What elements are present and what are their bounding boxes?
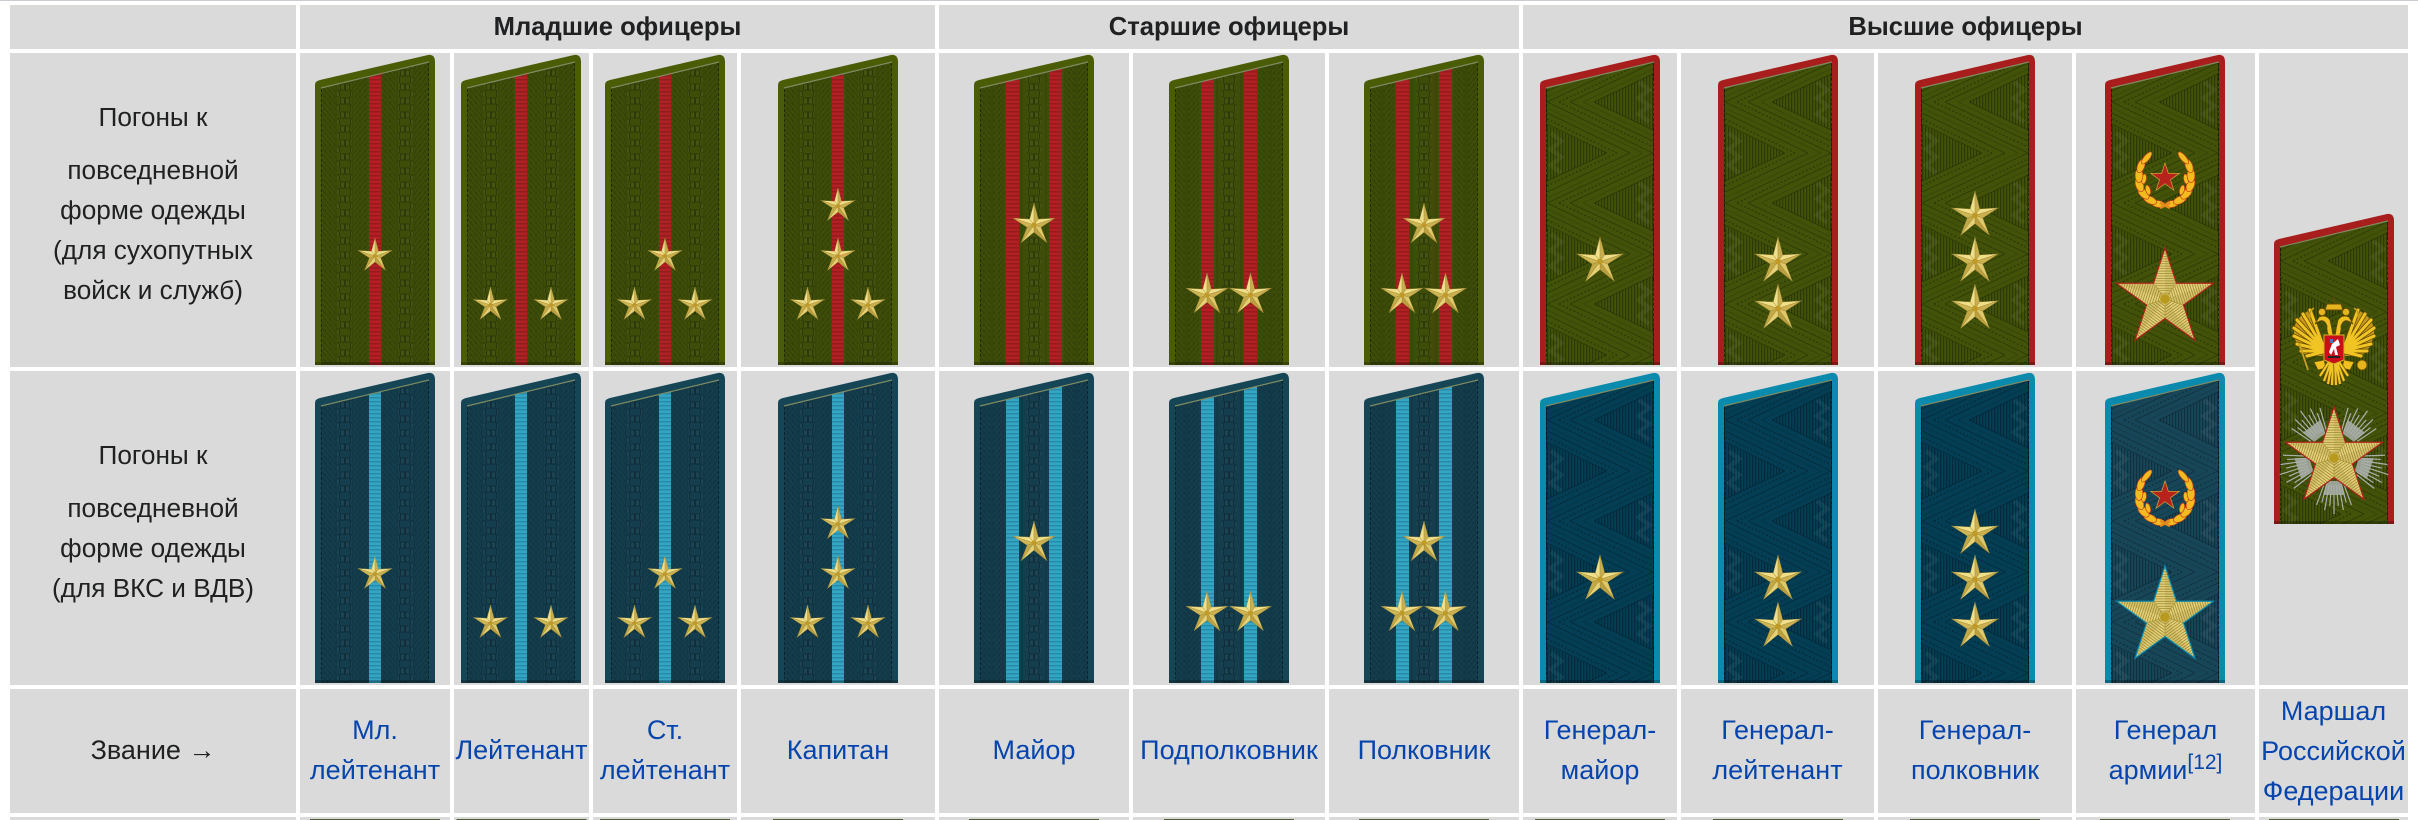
shoulder board: major general, aerospace bbox=[1540, 373, 1660, 683]
shoulder board: colonel, aerospace bbox=[1364, 373, 1484, 683]
row label: aerospace and airborne shoulder boards: форме одежды bbox=[60, 533, 246, 563]
shoulder board: senior lieutenant, aerospace bbox=[605, 373, 725, 683]
rank name: junior lieutenant: лейтенант bbox=[310, 755, 440, 785]
row label: aerospace and airborne shoulder boards: повседневной bbox=[67, 493, 239, 523]
rank name: senior lieutenant: лейтенант bbox=[600, 755, 730, 785]
shoulder board: colonel general, aerospace bbox=[1915, 373, 2035, 683]
shoulder board: major general, ground bbox=[1540, 55, 1660, 365]
row label: rank: Звание → bbox=[91, 735, 215, 765]
shoulder board: major, ground bbox=[974, 55, 1094, 365]
shoulder board: army general, ground bbox=[2105, 55, 2225, 365]
row label: ground forces shoulder boards: войск и служб) bbox=[63, 275, 243, 305]
shoulder board: colonel general, ground bbox=[1915, 55, 2035, 365]
shoulder board: lieutenant general, aerospace bbox=[1718, 373, 1838, 683]
shoulder board: junior lieutenant, ground bbox=[315, 55, 435, 365]
shoulder board: marshal of the Russian Federation bbox=[2274, 214, 2394, 524]
bottom row image edges bbox=[310, 819, 2399, 820]
rank name: marshal of the Russian Federation: Маршал bbox=[2281, 696, 2386, 726]
shoulder board: lieutenant, ground bbox=[461, 55, 581, 365]
icon: silver star rays bbox=[2274, 401, 2394, 514]
rank name: major general: Генерал- bbox=[1544, 715, 1656, 745]
rank name: senior lieutenant bbox=[600, 715, 730, 785]
rank name: junior lieutenant bbox=[310, 715, 440, 785]
rank name: colonel general: полковник bbox=[1911, 755, 2039, 785]
shoulder board: lieutenant colonel, aerospace bbox=[1169, 373, 1289, 683]
shoulder board: colonel, ground bbox=[1364, 55, 1484, 365]
icon: double-headed eagle bbox=[2294, 297, 2374, 385]
shoulder board: lieutenant colonel, ground bbox=[1169, 55, 1289, 365]
shoulder board: captain, ground bbox=[778, 55, 898, 365]
icon: marshal star bbox=[2283, 409, 2385, 506]
shoulder board: army general, aerospace bbox=[2105, 373, 2225, 683]
row label: ground forces shoulder boards bbox=[53, 102, 253, 305]
row label: aerospace and airborne shoulder boards bbox=[52, 440, 254, 603]
row label: ground forces shoulder boards: повседневной bbox=[67, 155, 239, 185]
rank name: colonel general bbox=[1911, 715, 2040, 785]
rank name: lieutenant: Лейтенант bbox=[455, 735, 588, 765]
rank name: senior lieutenant: Ст. bbox=[647, 715, 683, 745]
shoulder board: captain, aerospace bbox=[778, 373, 898, 683]
row label: ground forces shoulder boards: форме одежды bbox=[60, 195, 246, 225]
rank name: marshal of the Russian Federation: Федерации bbox=[2263, 776, 2404, 806]
rank name: colonel general: Генерал- bbox=[1919, 715, 2031, 745]
shoulder board: major, aerospace bbox=[974, 373, 1094, 683]
rank name: major general: майор bbox=[1561, 755, 1639, 785]
rank name: army general bbox=[2109, 715, 2222, 785]
rank name: captain: Капитан bbox=[787, 735, 889, 765]
rank name: major: Майор bbox=[993, 735, 1075, 765]
rank name: lieutenant general: Генерал- bbox=[1721, 715, 1834, 745]
row label: ground forces shoulder boards: (для сухопутных bbox=[53, 235, 253, 265]
row label: aerospace and airborne shoulder boards: Погоны к bbox=[99, 440, 207, 470]
row label: aerospace and airborne shoulder boards: (для ВКС и ВДВ) bbox=[52, 573, 254, 603]
rank name: lieutenant general bbox=[1712, 715, 1843, 785]
shoulder board: senior lieutenant, ground bbox=[605, 55, 725, 365]
rank name: lieutenant colonel: Подполковник bbox=[1140, 735, 1318, 765]
heading: senior officers: Старшие офицеры bbox=[1109, 13, 1349, 41]
top row shoulder boards group: ground forces bbox=[315, 55, 2225, 365]
rank name: lieutenant general: лейтенант bbox=[1712, 755, 1843, 785]
rank name: army general: Генерал bbox=[2114, 715, 2217, 745]
bottom row shoulder boards group: aerospace and airborne bbox=[315, 373, 2225, 683]
shoulder board: junior lieutenant, aerospace bbox=[315, 373, 435, 683]
rank name: marshal of the Russian Federation: Российской bbox=[2261, 736, 2406, 766]
heading: junior officers: Младшие офицеры bbox=[494, 13, 741, 41]
rank name: marshal of the Russian Federation bbox=[2261, 696, 2406, 806]
rank name: junior lieutenant: Мл. bbox=[352, 715, 398, 745]
rank name: major general bbox=[1544, 715, 1656, 785]
row label: ground forces shoulder boards: Погоны к bbox=[99, 102, 207, 132]
heading: supreme officers: Высшие офицеры bbox=[1848, 13, 2083, 41]
shoulder board: lieutenant, aerospace bbox=[461, 373, 581, 683]
shoulder board: lieutenant general, ground bbox=[1718, 55, 1838, 365]
rank name: colonel: Полковник bbox=[1358, 735, 1490, 765]
rank name: army general: армии[12] bbox=[2109, 751, 2222, 785]
